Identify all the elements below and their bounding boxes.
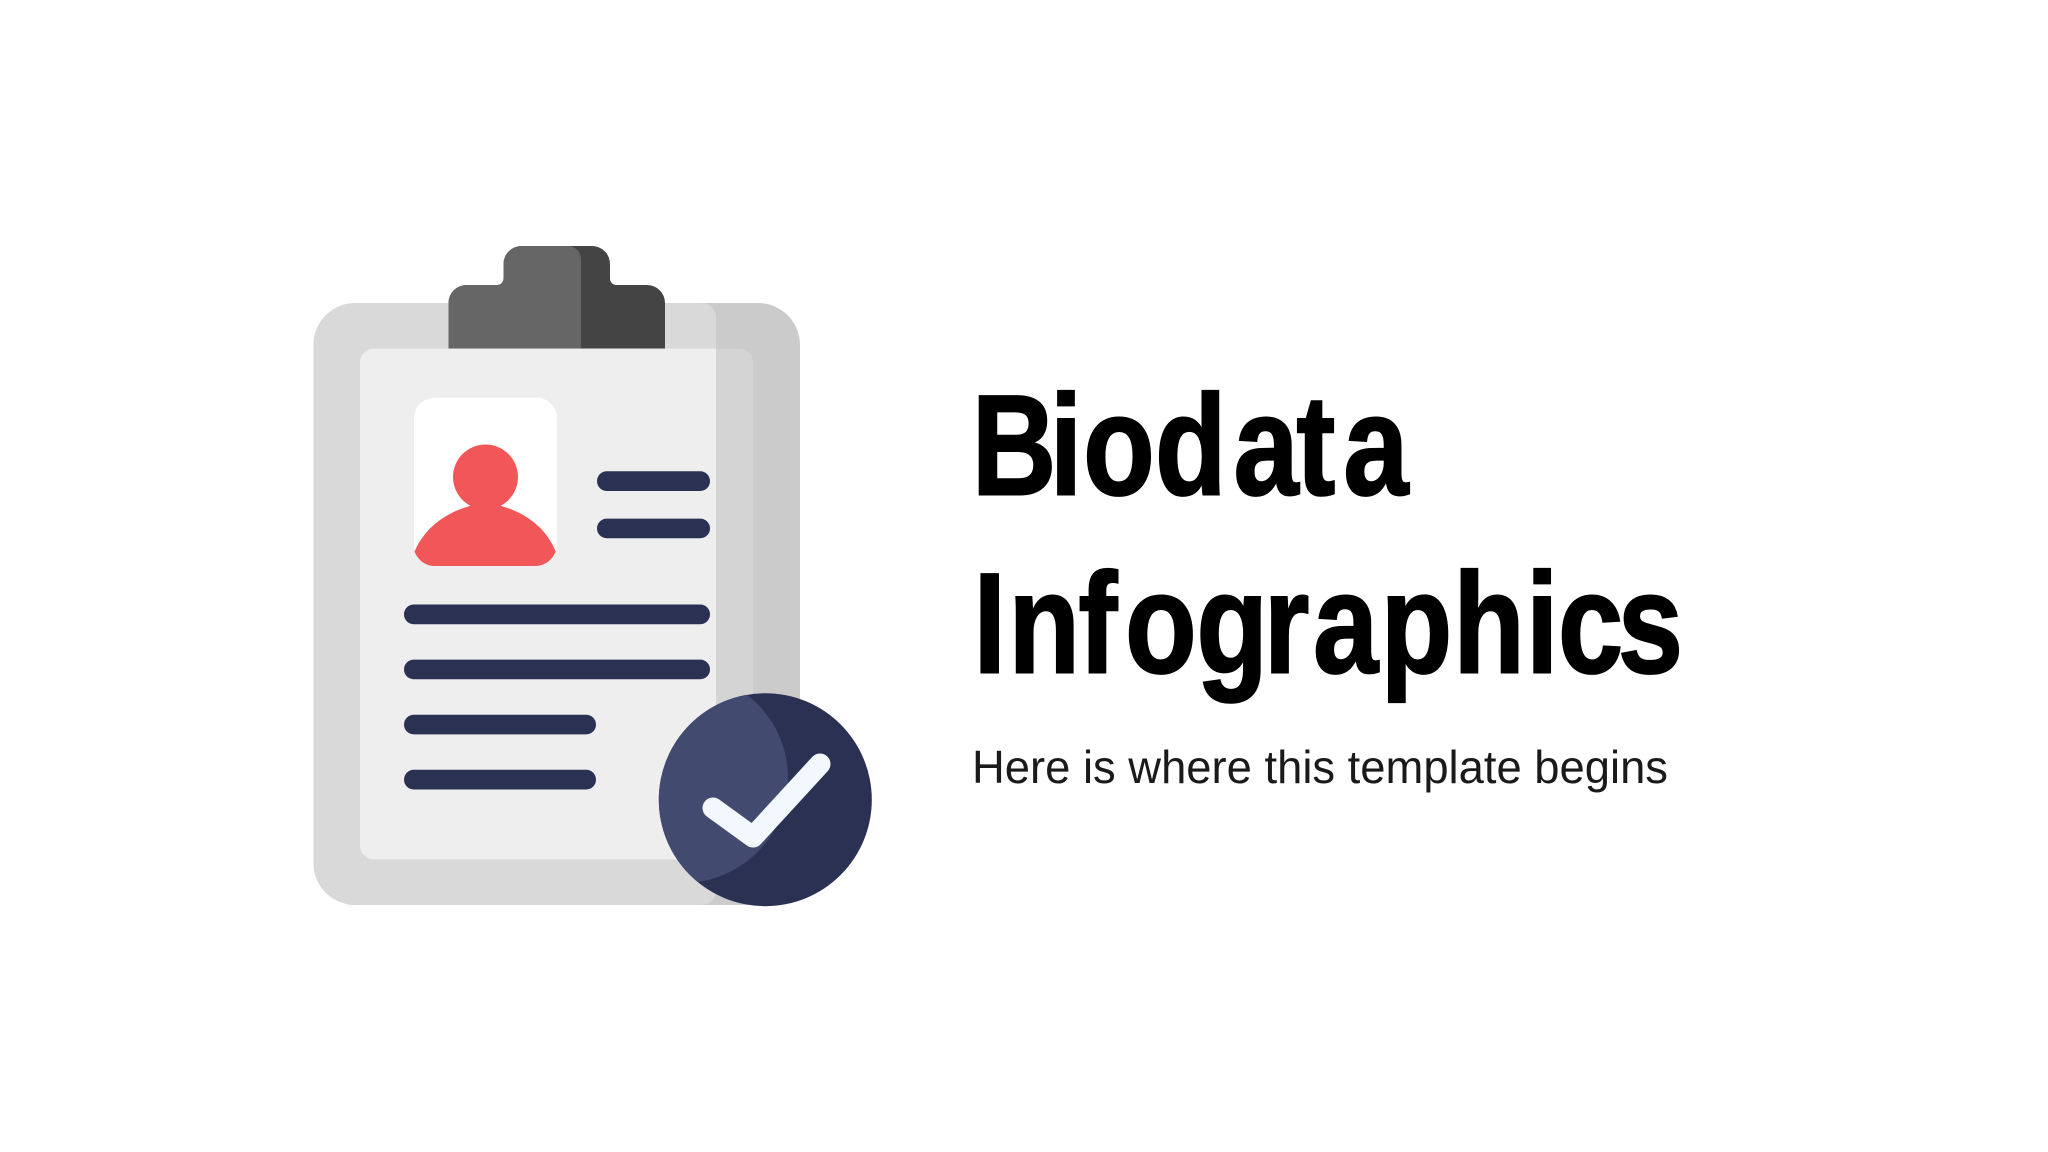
icon: person: [414, 444, 556, 566]
clipboard clip: [448, 246, 665, 349]
subtitle: Here is where this template begins: [972, 741, 1668, 793]
title: Biodata: [972, 365, 1410, 525]
title: [972, 365, 1683, 703]
photo card: [414, 398, 557, 566]
paper sheet: [360, 349, 753, 859]
text placeholder lines: [404, 471, 710, 790]
clipboard board: [314, 303, 800, 905]
icon: check badge: [658, 693, 872, 906]
title: Infographics: [973, 543, 1683, 703]
icon: clipboard with biodata form: [314, 246, 872, 906]
